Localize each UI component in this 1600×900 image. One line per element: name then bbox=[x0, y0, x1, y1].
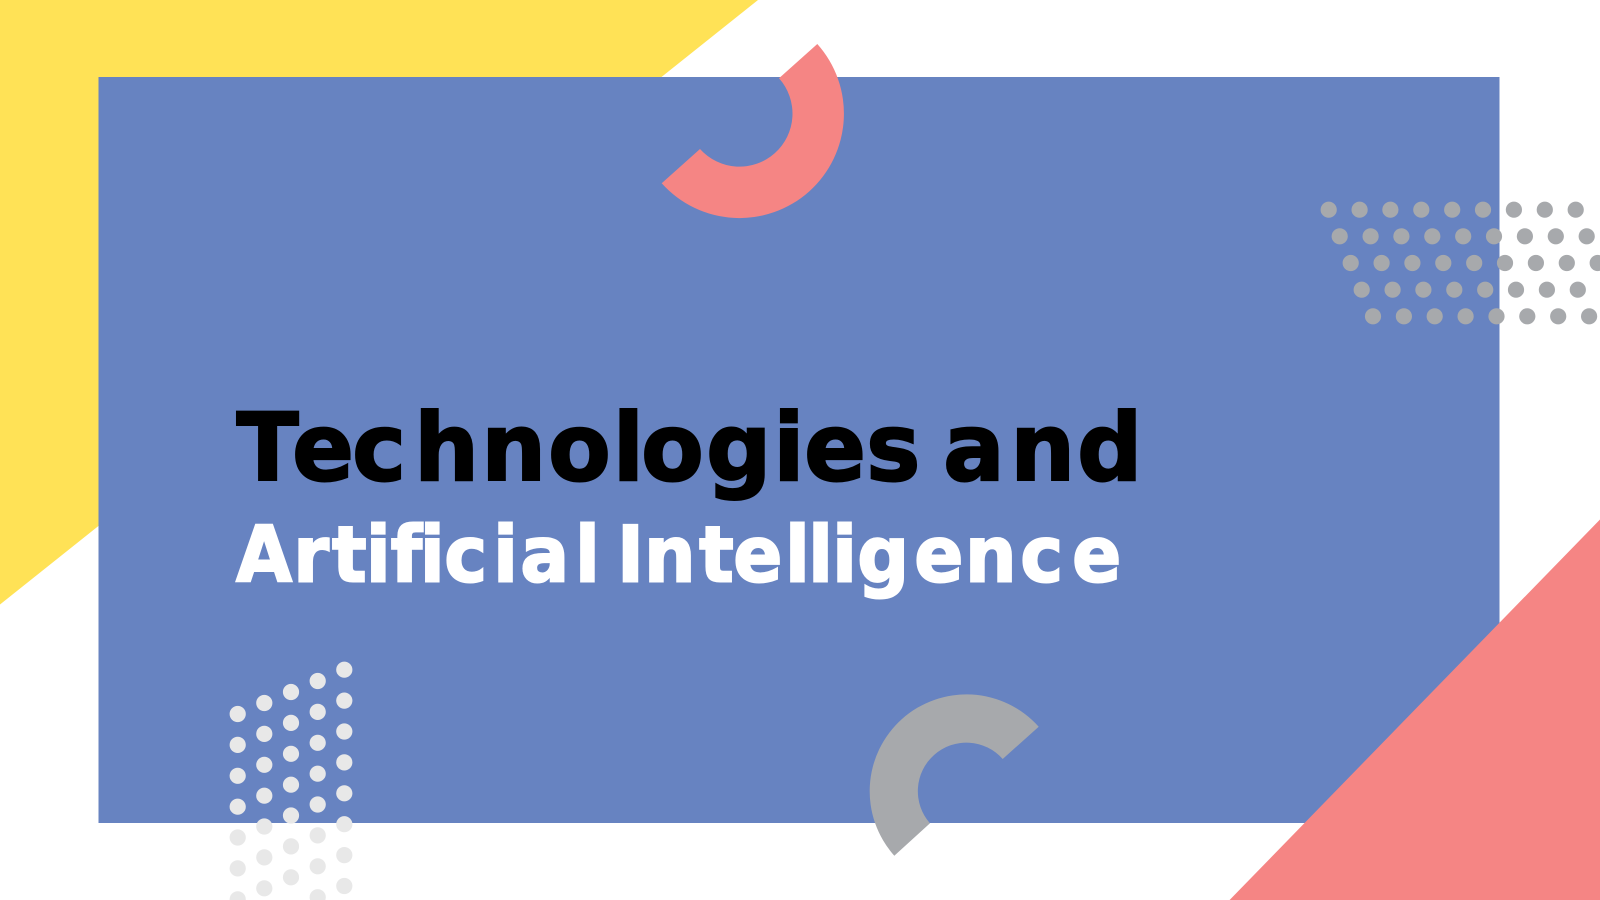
coral arc bbox=[662, 44, 844, 218]
light dot grid bbox=[230, 662, 352, 900]
gray arc bbox=[870, 694, 1039, 856]
coral corner triangle bbox=[1230, 520, 1600, 900]
subtitle: Artificial Intelligence: Artificial Intelligence bbox=[236, 509, 1121, 600]
yellow corner triangle bbox=[0, 0, 758, 604]
blue main panel bbox=[98, 77, 1500, 823]
gray dot grid bbox=[1321, 202, 1600, 324]
title: Technologies and: Technologies and bbox=[236, 393, 1142, 502]
